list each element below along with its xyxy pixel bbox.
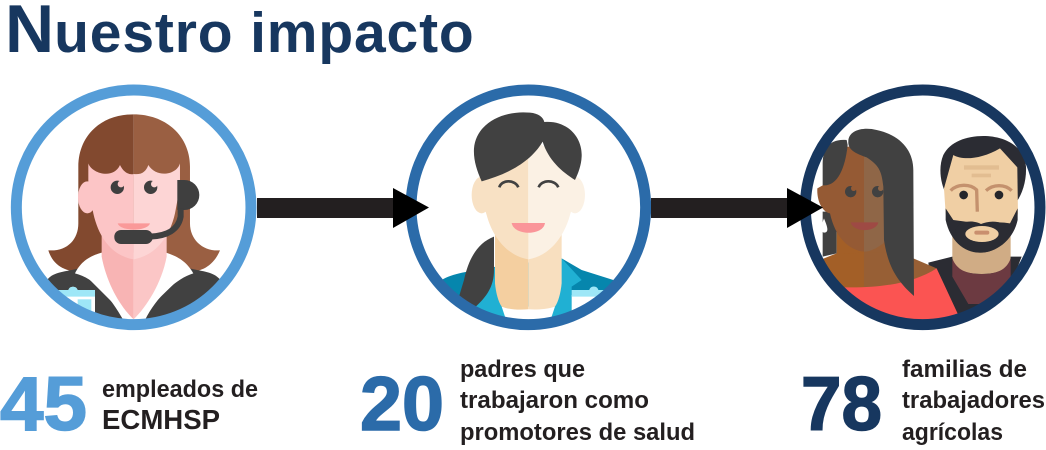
stat: 78 families [801, 356, 1045, 447]
stat: 20 parents: trabajaron como [460, 387, 649, 414]
stat: 20 parents: promotores de salud [460, 419, 695, 446]
arrow: parents to families [651, 188, 823, 228]
portrait: smiling parent promoter [411, 90, 646, 325]
stat: 20 parents: 20 [360, 362, 444, 447]
stat: 45 employees: ECMHSP [102, 404, 220, 435]
stat: 78 families: 78 [801, 362, 882, 447]
stat: 45 employees: 45 [0, 362, 87, 447]
stat: 45 employees [0, 362, 258, 447]
arrow: employees to parents [257, 188, 429, 228]
stat: 20 parents [360, 356, 695, 447]
stat: 78 families: trabajadores [902, 387, 1045, 414]
stat: 45 employees: empleados de [102, 376, 258, 403]
stat: 20 parents: padres que [460, 356, 585, 383]
portrait: farmworker family couple [805, 90, 1040, 325]
stat: 78 families: familias de [902, 356, 1027, 383]
stat: 78 families: agrícolas [902, 419, 1003, 446]
portrait: ECMHSP employee with headset [16, 90, 251, 325]
